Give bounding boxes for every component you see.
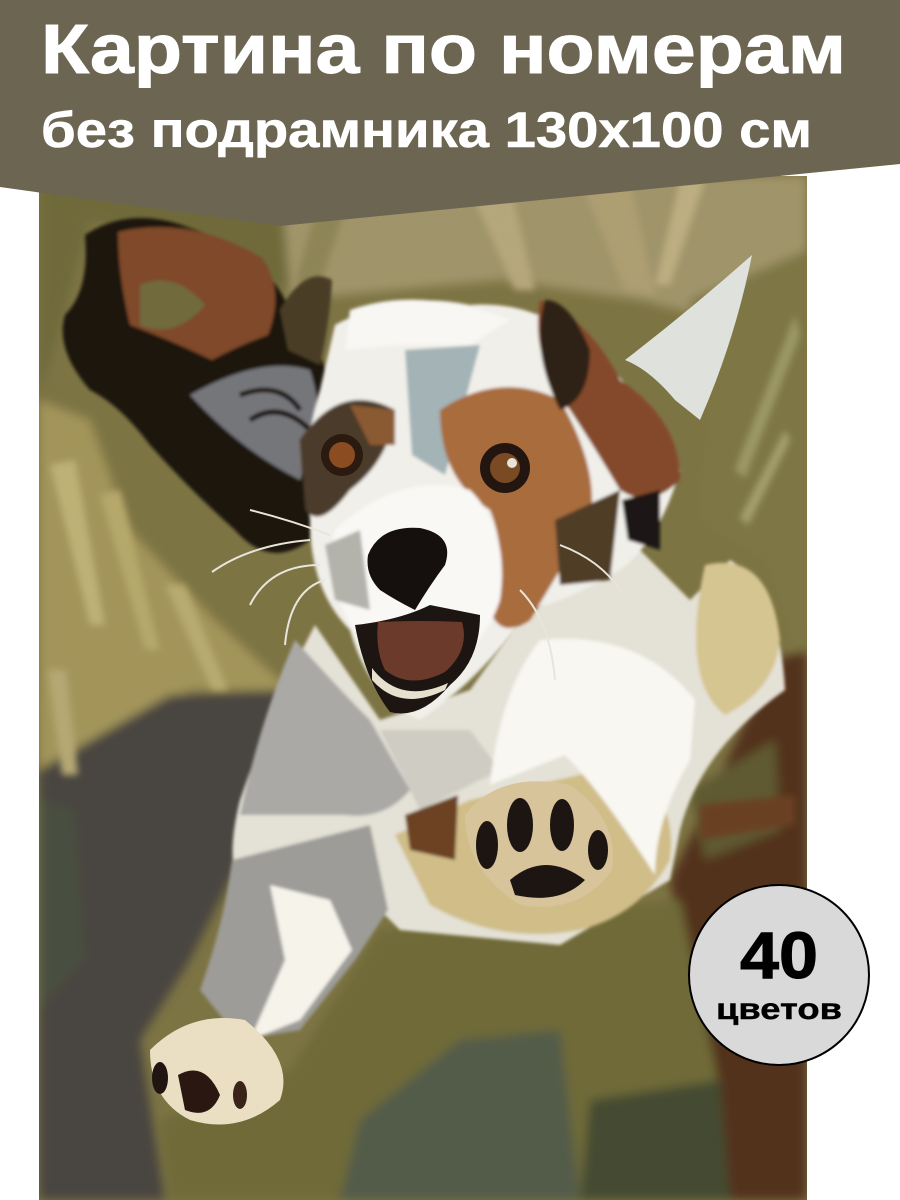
dog ear: left dark [63,218,335,553]
dog body [200,540,785,1040]
title: Картина по номерам [41,10,846,88]
dog eyes [321,434,530,493]
dog head [300,300,680,720]
dog paw: right [465,781,613,907]
dog ear: right white [625,255,752,420]
dog nose [368,528,447,610]
dog paw: left [150,1018,283,1124]
painting: running dog [39,176,807,1200]
header banner [0,0,900,226]
dog mouth [355,605,480,713]
painting background [39,176,807,1200]
badge number: 40 [740,918,818,992]
background brush strokes [48,180,800,840]
subtitle: без подрамника 130x100 см [41,102,812,158]
dog whiskers [212,510,620,680]
badge label: цветов [716,993,842,1026]
badge: 40 colours [689,885,869,1065]
